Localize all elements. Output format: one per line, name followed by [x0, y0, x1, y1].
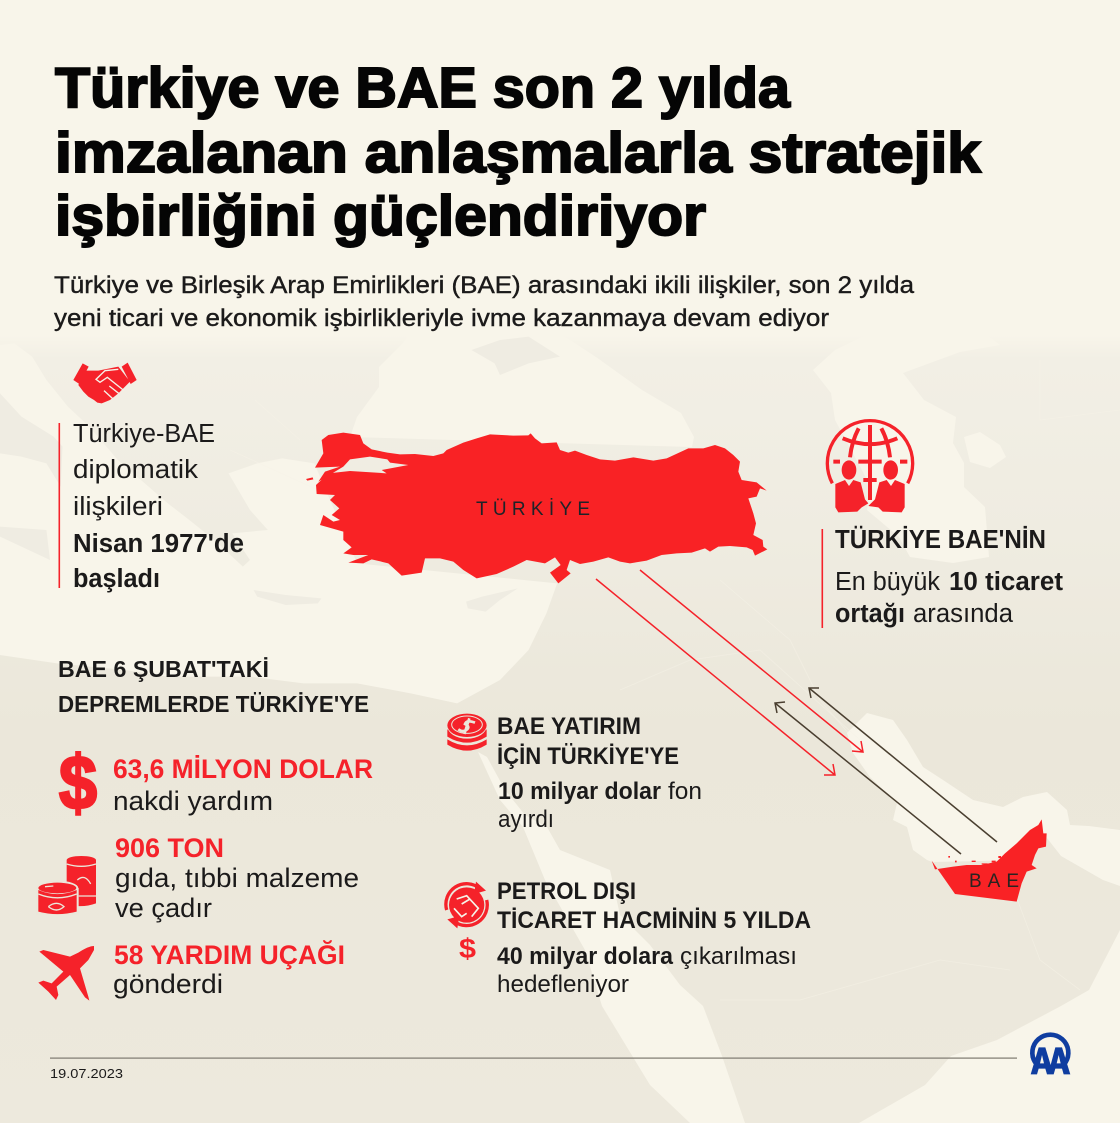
panel: trade partner [822, 524, 1064, 628]
icon: coin stack [447, 713, 487, 751]
heading: earthquake aid: DEPREMLERDE TÜRKİYE'YE [58, 691, 369, 717]
trade volume text: 40 milyar dolara [497, 943, 674, 970]
subtitle: yeni ticari ve ekonomik işbirlikleriyle ivme kazanmaya devam ediyor [54, 305, 829, 332]
trade volume text: PETROL DIŞI [497, 878, 636, 905]
icon: dollar: $ [59, 741, 97, 826]
title: imzalanan anlaşmalarla stratejik [55, 121, 981, 185]
icon: globe with business people [827, 421, 913, 512]
aid: planes: gönderdi [113, 969, 223, 999]
trade volume text [497, 878, 811, 998]
subtitle [54, 272, 915, 332]
panel: trade partner: TÜRKİYE BAE'NİN [835, 524, 1046, 554]
investment text: BAE YATIRIM [497, 713, 641, 740]
panel: diplomatic relations: ilişkileri [73, 493, 163, 521]
trade volume text: hedefleniyor [497, 971, 629, 998]
map: BAE: BAE [969, 871, 1019, 892]
aid: tonnes: 906 TON [115, 833, 224, 863]
panel: trade partner: ortağı [835, 600, 905, 628]
icon: handshake [73, 363, 137, 403]
title: işbirliğini güçlendiriyor [55, 184, 706, 248]
panel: diplomatic relations [58, 420, 244, 593]
aid: cash: nakdi yardım [113, 786, 273, 816]
icon: trade cycle with dollar: $ [459, 933, 476, 964]
aid: planes [113, 939, 345, 999]
logo: AA [1031, 1035, 1070, 1074]
icon: airplane [38, 946, 94, 1001]
arrows: Türkiye to BAE [596, 570, 863, 775]
panel: diplomatic relations: Nisan 1977'de [73, 530, 244, 558]
trade volume text: TİCARET HACMİNİN 5 YILDA [497, 907, 811, 934]
trade volume text: çıkarılması [680, 943, 797, 970]
map: BAE [932, 819, 1047, 902]
investment text [497, 713, 702, 833]
title [55, 56, 981, 248]
panel: trade partner: arasında [913, 600, 1014, 628]
panel: trade partner: En büyük [835, 568, 940, 596]
icon: trade cycle with dollar [446, 882, 487, 964]
arrows: BAE to Türkiye [775, 688, 997, 854]
subtitle: Türkiye ve Birleşik Arap Emirlikleri (BAE) arasındaki ikili ilişkiler, son 2 yılda [54, 272, 915, 299]
investment text: İÇİN TÜRKİYE'YE [497, 743, 679, 770]
panel: diplomatic relations: başladı [73, 565, 160, 593]
heading: earthquake aid [58, 656, 369, 717]
panel: diplomatic relations: Türkiye-BAE [73, 420, 215, 448]
aid: cash [113, 754, 373, 816]
icon: cans [36, 856, 96, 915]
heading: earthquake aid: BAE 6 ŞUBAT'TAKİ [58, 656, 269, 682]
aid: planes: 58 YARDIM UÇAĞI [114, 939, 345, 970]
map: Türkiye: TÜRKİYE [476, 499, 590, 520]
aid: tonnes: gıda, tıbbi malzeme [115, 863, 359, 893]
panel: trade partner: 10 ticaret [949, 568, 1064, 596]
footer rule [50, 1058, 1017, 1059]
map: Türkiye [306, 433, 767, 583]
aid: cash: 63,6 MİLYON DOLAR [113, 754, 373, 784]
title: Türkiye ve BAE son 2 yılda [55, 56, 791, 120]
aid: tonnes: ve çadır [115, 893, 212, 923]
investment text: ayırdı [498, 806, 554, 833]
investment text: fon [668, 778, 702, 805]
panel: diplomatic relations: diplomatik [73, 456, 198, 484]
footer date: 19.07.2023 [50, 1066, 123, 1081]
aid: tonnes [115, 833, 359, 923]
investment text: 10 milyar dolar [498, 778, 661, 805]
